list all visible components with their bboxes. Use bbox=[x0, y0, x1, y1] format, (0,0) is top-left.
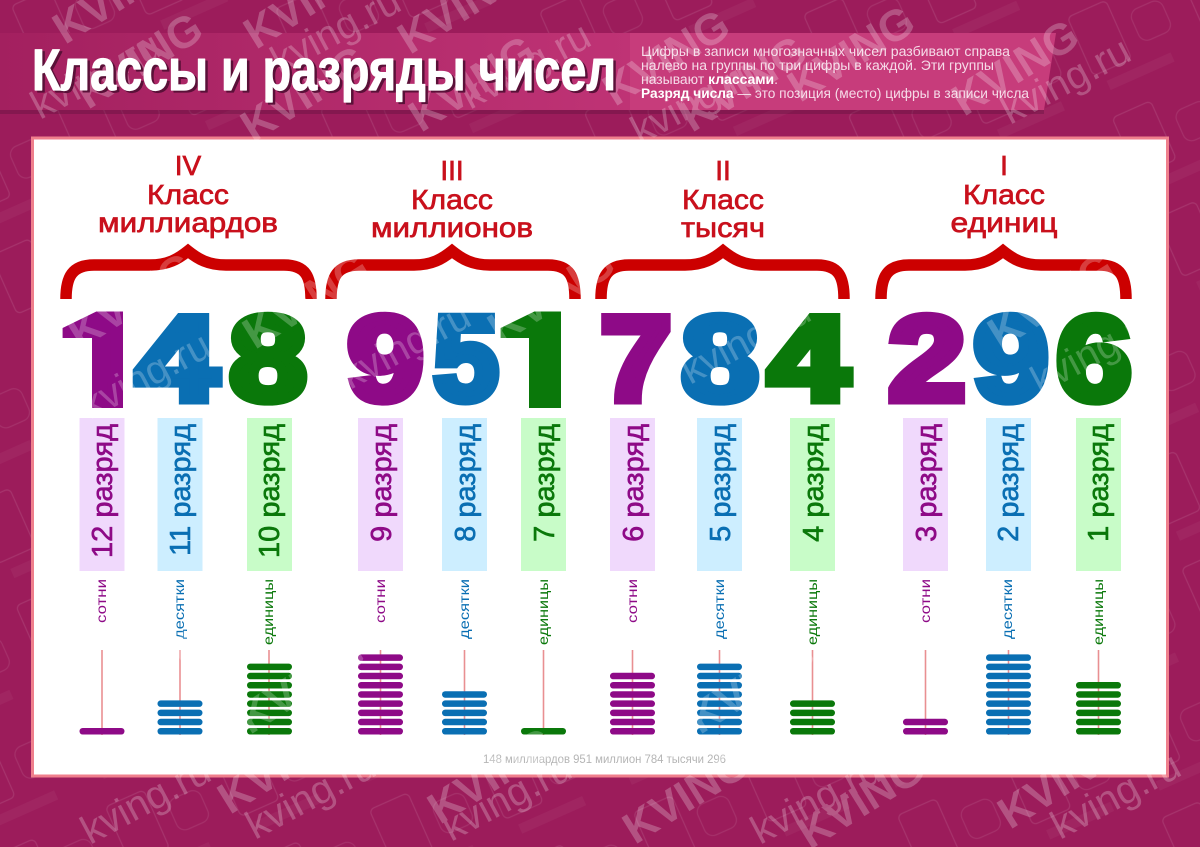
watermark overlay: KVING bbox=[229, 628, 373, 743]
number digits: 1 bbox=[499, 293, 587, 427]
description text: Цифры в записи многозначных чисел разбивают справа bbox=[641, 44, 1011, 59]
watermark overlay: KVING bbox=[943, 10, 1087, 125]
watermark overlay: kving.ru bbox=[994, 28, 1138, 133]
class IV heading and brace: IV bbox=[175, 150, 202, 181]
rods bbox=[102, 650, 1098, 735]
number digits: 7 bbox=[600, 292, 672, 426]
description text bbox=[641, 44, 1029, 101]
rank strips: 3 разряд bbox=[911, 424, 943, 542]
counter bars: 951 bbox=[358, 654, 566, 734]
watermark overlay: kving.ru bbox=[1044, 743, 1188, 847]
place names: десятки bbox=[999, 579, 1015, 639]
watermark overlay: KVING bbox=[679, 628, 823, 743]
full number caption: 148 миллиардов 951 миллион 784 тысячи 296 bbox=[483, 752, 726, 766]
watermark overlay: KVING bbox=[209, 708, 353, 823]
rank strips: 6 разряд bbox=[618, 424, 650, 542]
class III heading and brace bbox=[331, 155, 575, 299]
watermark overlay: kving.ru bbox=[674, 288, 818, 393]
class II heading and brace bbox=[601, 155, 844, 299]
panel: white main area bbox=[32, 138, 1168, 776]
banner shadow bbox=[0, 110, 1044, 114]
number digits: 1 bbox=[61, 293, 149, 427]
watermark overlay: KVING bbox=[671, 26, 815, 141]
place names: сотни bbox=[93, 579, 109, 623]
title: Классы и разряды чисел bbox=[32, 38, 616, 103]
place names: единицы bbox=[1090, 579, 1106, 645]
number digits: 2 bbox=[888, 292, 966, 426]
number digits: 9 bbox=[348, 292, 424, 426]
number digits: 9 bbox=[974, 292, 1048, 426]
class II heading and brace: II bbox=[715, 155, 731, 186]
rank strips: 1 разряд bbox=[1083, 424, 1115, 542]
class III heading and brace: Класс bbox=[411, 184, 493, 215]
watermark overlay: kving.ru bbox=[239, 743, 383, 847]
rank strips: 7 разряд bbox=[529, 424, 561, 542]
place names: единицы bbox=[260, 579, 276, 645]
watermark overlay: KVING bbox=[234, 243, 378, 358]
rank strips bbox=[80, 418, 1121, 571]
class IV heading and brace: миллиардов bbox=[98, 207, 278, 238]
class III heading and brace: III bbox=[440, 155, 464, 186]
watermark overlay: kving.ru bbox=[74, 323, 218, 428]
watermark overlay: KVING bbox=[109, 593, 253, 708]
place names: десятки bbox=[456, 579, 472, 639]
description text: называют классами. bbox=[641, 72, 778, 87]
watermark overlay: KVING bbox=[989, 723, 1133, 838]
number digits: 8 bbox=[682, 292, 758, 426]
rank strips: 9 разряд bbox=[366, 424, 398, 542]
place names: десятки bbox=[171, 579, 187, 639]
title: Классы и разряды чисел bbox=[34, 40, 618, 105]
class I heading and brace bbox=[881, 150, 1126, 299]
rank strips: 4 разряд bbox=[798, 424, 830, 542]
class I heading and brace: единиц bbox=[950, 207, 1058, 238]
class IV heading and brace bbox=[66, 150, 311, 299]
watermark overlay: KVING bbox=[479, 238, 623, 353]
watermark overlay: kving.ru bbox=[334, 293, 478, 398]
class IV heading and brace: Класс bbox=[147, 179, 229, 210]
description text: Разряд числа — это позиция (место) цифры в записи числа bbox=[641, 86, 1029, 101]
counter bars: 296 bbox=[903, 654, 1121, 734]
class II heading and brace: Класс bbox=[682, 184, 764, 215]
watermark overlay: KVING bbox=[979, 243, 1123, 358]
class III heading and brace: миллионов bbox=[371, 212, 533, 243]
counter bars: 148 bbox=[80, 664, 292, 734]
rank strips: 12 разряд bbox=[87, 424, 119, 558]
class I heading and brace: I bbox=[1000, 150, 1008, 181]
watermark overlay: kving.ru bbox=[435, 745, 579, 847]
place names: сотни bbox=[917, 579, 933, 623]
rank strips: 11 разряд bbox=[165, 424, 197, 556]
banner: description background bbox=[600, 33, 1056, 110]
watermark overlay: kving.ru bbox=[24, 23, 168, 128]
watermark overlay: kving.ru bbox=[454, 13, 598, 118]
counter bars: 784 bbox=[610, 664, 835, 734]
watermark overlay: kving.ru bbox=[1024, 298, 1168, 403]
number digits: 5 bbox=[434, 292, 498, 426]
banner: title background bbox=[0, 33, 630, 110]
place names: десятки bbox=[711, 579, 727, 639]
rank strips: 10 разряд bbox=[254, 424, 286, 558]
watermark overlay: KVING bbox=[59, 243, 203, 358]
watermark overlay: KVING bbox=[67, 3, 211, 118]
rank strips: 2 разряд bbox=[993, 424, 1025, 542]
watermark overlay: KVING bbox=[419, 718, 563, 833]
place names: сотни bbox=[624, 579, 640, 623]
description text: налево на группы по три цифры в каждой. Эти группы bbox=[641, 58, 994, 73]
number digits: 8 bbox=[230, 292, 306, 426]
number digits: 4 bbox=[768, 292, 849, 426]
watermark overlay: KVING bbox=[400, 26, 544, 141]
place names bbox=[93, 579, 1106, 645]
watermark overlay: KVING bbox=[232, 36, 376, 151]
number digits bbox=[62, 312, 1132, 408]
number digits: 6 bbox=[1056, 292, 1132, 426]
class I heading and brace: Класс bbox=[963, 179, 1045, 210]
number digits: 4 bbox=[136, 292, 218, 426]
class II heading and brace: тысяч bbox=[681, 212, 765, 243]
place names: сотни bbox=[372, 579, 388, 623]
place names: единицы bbox=[535, 579, 551, 645]
rank strips: 8 разряд bbox=[450, 424, 482, 542]
watermark overlay: kving.ru bbox=[624, 48, 768, 153]
rank strips: 5 разряд bbox=[705, 424, 737, 542]
place names: единицы bbox=[804, 579, 820, 645]
watermark overlay: KVING bbox=[594, 0, 738, 115]
